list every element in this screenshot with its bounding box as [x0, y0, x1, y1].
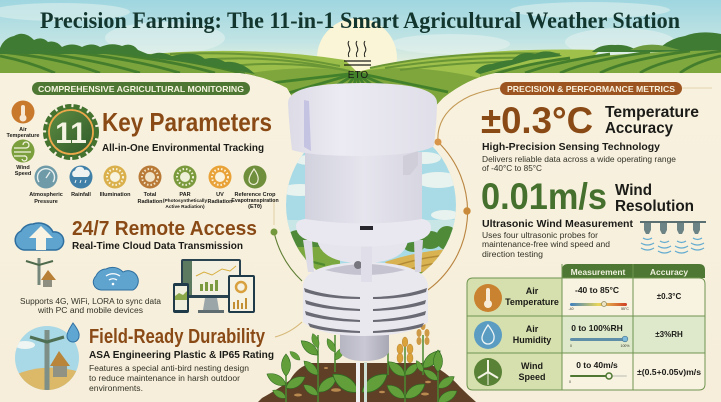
- heading: durability: Field-Ready Durability: [89, 326, 266, 348]
- metric: temperature accuracy: ±0.3°C: [481, 100, 593, 141]
- icon: total radiation: [137, 166, 163, 205]
- table header labels: Measurement: [571, 267, 626, 277]
- icon: air temperature: Temperature: [7, 133, 39, 139]
- icon: total radiation: Radiation: [137, 199, 163, 205]
- subheading: all-in-one: All-in-One Environmental Tracking: [102, 143, 264, 154]
- icon: UV radiation: Radiation: [207, 199, 233, 205]
- icon: UV radiation: [207, 166, 233, 205]
- table header labels: Accuracy: [650, 267, 688, 277]
- heading: remote access: 24/7 Remote Access: [72, 218, 257, 240]
- text: high-precision sensing: Delivers reliable data across a wide operating range: [482, 155, 677, 164]
- row: air humidity: 0: [570, 344, 572, 348]
- icon: air temperature: [7, 100, 39, 139]
- row: air humidity: 0 to 100%RH: [571, 323, 623, 333]
- text: high-precision sensing: [482, 141, 677, 173]
- row: wind speed: 0: [569, 380, 571, 384]
- section pill: metrics: PRECISION & PERFORMANCE METRICS: [507, 84, 675, 94]
- badge: 11: [46, 107, 96, 157]
- row: air temperature: Air: [526, 286, 539, 296]
- row: wind speed: Wind: [521, 361, 543, 371]
- text: high-precision sensing: of -40°C to 85°C: [482, 164, 542, 173]
- subheading: cloud data transmission: Real-Time Cloud Data Transmission: [72, 241, 243, 252]
- text: durability description: Features a special anti-bird nesting design: [89, 364, 249, 373]
- metric: temperature accuracy: [481, 100, 699, 141]
- icon: reference crop evapotranspiration: Reference Crop: [235, 192, 276, 198]
- panel: 24/7 remote access: [15, 218, 257, 315]
- icon: reference crop evapotranspiration: Evapotranspiration: [231, 198, 279, 204]
- icon: PAR: Active Radiation): [165, 204, 205, 210]
- row: air temperature: [474, 284, 681, 312]
- row: air temperature: -40: [568, 307, 574, 311]
- icon: UV radiation: UV: [216, 192, 224, 198]
- icon: ultrasonic probes: [640, 221, 706, 253]
- icon: station in field: [15, 323, 80, 392]
- icon: rainfall: [70, 166, 92, 198]
- icon: PAR: (Photosynthetically: [163, 198, 207, 204]
- section pill: metrics: [500, 82, 682, 95]
- icon: ETO evapotranspiration: ETO: [348, 70, 368, 81]
- row: wind speed: Speed: [518, 372, 546, 382]
- icon: wind speed: Wind: [16, 165, 30, 171]
- title: Precision Farming: The 11-in-1 Smart Agricultural Weather Station: [40, 8, 680, 33]
- row: wind speed: [474, 358, 702, 386]
- panel: precision and performance metrics: [467, 82, 706, 390]
- text: ultrasonic wind measurement: Uses four ultrasonic probes for: [482, 231, 598, 240]
- soil and crop plants: [258, 322, 476, 402]
- text: connectivity: [20, 297, 162, 315]
- icon: illumination: [100, 166, 131, 198]
- icon: monitor, tablet and phone dashboards: [173, 259, 255, 313]
- metric: wind resolution: 0.01m/s: [481, 176, 607, 217]
- row: air temperature: ±0.3°C: [657, 292, 681, 301]
- subheading: material and rating: ASA Engineering Plastic & IP65 Rating: [89, 350, 274, 361]
- row: air humidity: [474, 321, 683, 349]
- icon: reference crop evapotranspiration: [231, 166, 279, 210]
- row: air temperature: 55°C: [621, 307, 629, 311]
- text: durability description: environments.: [89, 384, 143, 393]
- icon: PAR: PAR: [179, 192, 191, 198]
- metric: wind resolution: Resolution: [615, 198, 694, 215]
- table header labels: [571, 267, 688, 277]
- row: wind speed: ±(0.5+0.05v)m/s: [637, 368, 702, 377]
- heading: key parameters: Key Parameters: [102, 107, 272, 137]
- text: ultrasonic wind measurement: direction testing: [482, 250, 543, 259]
- panel: comprehensive agricultural monitoring: [7, 82, 279, 210]
- metric: temperature accuracy: Accuracy: [605, 120, 673, 137]
- icon: wind speed: Speed: [15, 171, 31, 177]
- icon: PAR: [163, 166, 207, 210]
- icon: atmospheric pressure: Atmospheric: [29, 192, 63, 198]
- icon: total radiation: Total: [144, 192, 157, 198]
- metric: temperature accuracy: Temperature: [605, 104, 699, 121]
- text: ultrasonic wind measurement: Ultrasonic Wind Measurement: [482, 218, 634, 230]
- icon: atmospheric pressure: [29, 166, 63, 205]
- icon: rainfall: Rainfall: [71, 192, 91, 198]
- central scenic circle with ring: [270, 88, 712, 337]
- text: connectivity: with PC and mobile devices: [37, 306, 143, 315]
- row: air temperature: Temperature: [505, 297, 559, 307]
- icon: small weather station: [26, 258, 56, 287]
- panel: field-ready durability: [15, 323, 274, 393]
- metric: wind resolution: Wind: [615, 182, 652, 199]
- icon: atmospheric pressure: Pressure: [34, 199, 58, 205]
- text: durability description: to reduce maintenance in harsh outdoor: [89, 374, 240, 383]
- table: measurement and accuracy: [467, 264, 705, 390]
- row: air temperature: -40 to 85°C: [575, 285, 619, 295]
- icon: upload cloud: [15, 223, 64, 250]
- text: high-precision sensing: High-Precision Sensing Technology: [482, 141, 660, 153]
- icon: reference crop evapotranspiration: (ETθ): [248, 204, 262, 210]
- text: durability description: [89, 364, 249, 393]
- text: connectivity: Supports 4G, WiFi, LORA to sync data: [20, 297, 162, 306]
- metric: wind resolution: [481, 176, 694, 217]
- icon: wifi cloud: [93, 267, 138, 290]
- section pill: monitoring: COMPREHENSIVE AGRICULTURAL MONITORING: [38, 84, 244, 94]
- icon: wind speed: [12, 140, 34, 177]
- row: air humidity: ±3%RH: [655, 330, 683, 339]
- icon: illumination: Illumination: [100, 192, 131, 198]
- row: air humidity: Air: [526, 324, 539, 334]
- row: air humidity: Humidity: [513, 335, 551, 345]
- background: sky and farmland: [0, 0, 721, 104]
- row: wind speed: 0 to 40m/s: [576, 360, 618, 370]
- text: ultrasonic wind measurement: maintenance-free wind speed and: [482, 240, 610, 249]
- icon: air temperature: Air: [19, 127, 28, 133]
- row: air humidity: 100%: [621, 344, 629, 348]
- badge: 11: 11: [55, 117, 87, 150]
- icon: ETO evapotranspiration: [344, 41, 371, 81]
- text: ultrasonic wind measurement: [482, 218, 634, 259]
- weather station device: [288, 83, 437, 402]
